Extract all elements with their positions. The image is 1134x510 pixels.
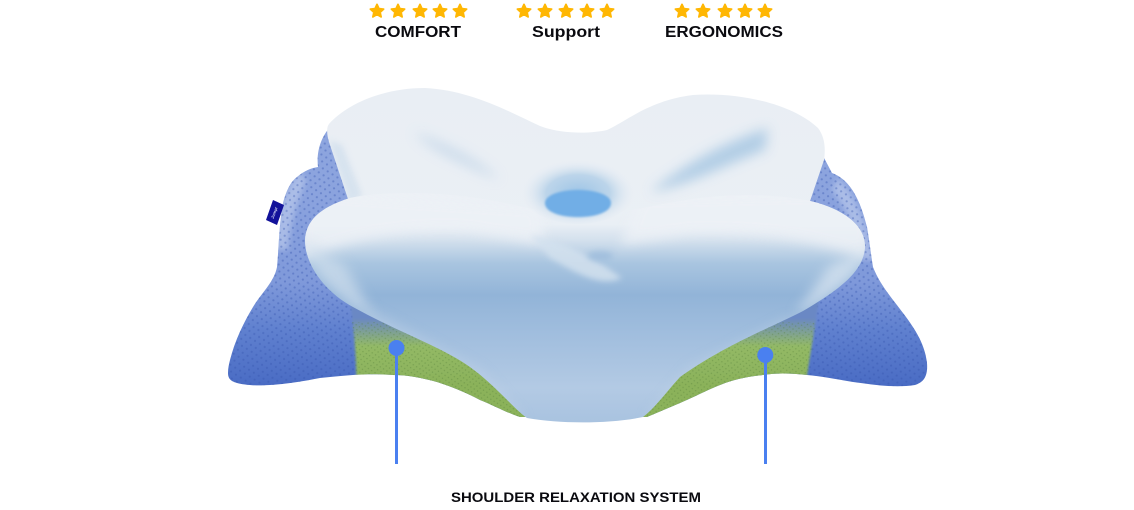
soft folds on back surface — [329, 128, 768, 205]
callout pointer left — [388, 340, 404, 464]
back pillow surface — [327, 88, 825, 250]
callout pointer right — [757, 347, 773, 464]
folds on front surface — [305, 198, 865, 394]
fabric tag: Jumpr — [270, 206, 279, 219]
head cradle hole — [520, 156, 636, 224]
green shoulder panel left — [351, 306, 526, 417]
rating: support: Support — [532, 24, 600, 41]
caption: SHOULDER RELAXATION SYSTEM — [451, 490, 701, 505]
rating: ergonomics: ERGONOMICS — [665, 24, 783, 41]
fabric tag — [266, 200, 284, 225]
rating: comfort — [370, 4, 467, 41]
rating: support — [517, 4, 614, 41]
rating: ergonomics — [665, 4, 783, 41]
rating: comfort: COMFORT — [375, 24, 462, 41]
green shoulder panel right — [640, 300, 819, 425]
mesh base of pillow — [228, 130, 928, 417]
front pillow surface — [305, 193, 865, 422]
pillow illustration — [220, 88, 935, 425]
